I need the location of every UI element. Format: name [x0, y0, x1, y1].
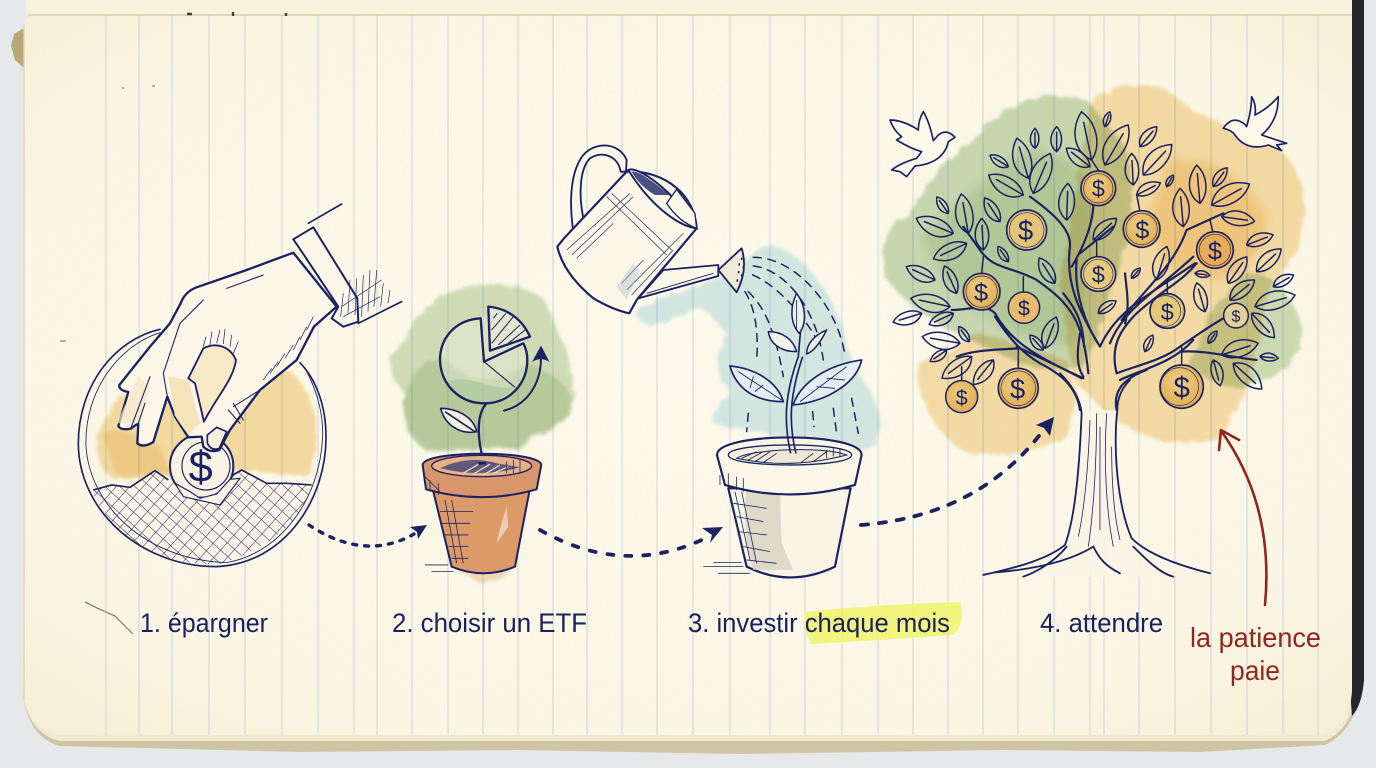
left page stain	[11, 28, 24, 68]
label: step 3: 3. investir chaque mois	[688, 608, 950, 638]
step 1: hand dropping a coin into a glass sphere	[78, 204, 402, 567]
blue water wash	[637, 245, 880, 452]
orange wash right and center	[1060, 84, 1304, 443]
branches	[952, 160, 1257, 410]
terracotta pot	[423, 454, 541, 583]
coins: $	[1018, 215, 1033, 246]
coins: $	[1018, 297, 1030, 321]
annotation: patience pays	[1190, 622, 1321, 686]
coins: $	[1135, 216, 1149, 244]
label: step 1: 1. épargner	[140, 608, 268, 638]
coins: $	[1010, 373, 1025, 404]
orange deep patch	[1147, 160, 1267, 280]
arrow: step 2 to step 3	[540, 527, 723, 556]
soil crosshatch	[92, 470, 312, 564]
step 2 and step 3 illustrations	[391, 145, 880, 583]
soil lip over coin	[175, 478, 240, 505]
arrow: step 1 to step 2	[309, 525, 427, 546]
watering can	[557, 145, 744, 313]
coins: $	[956, 386, 968, 410]
label: step 2: 2. choisir un ETF	[392, 608, 587, 638]
darker green wash band	[403, 359, 572, 450]
annotation: patience pays: la patience	[1190, 622, 1321, 653]
green wash left	[884, 95, 1132, 369]
tree watercolor washes	[884, 84, 1304, 453]
shirt cuff	[293, 204, 402, 327]
red arrow pointing to the tree	[1219, 430, 1266, 605]
coins: $	[1173, 371, 1190, 404]
coins: $	[1092, 262, 1105, 288]
top page strip	[26, 0, 1352, 16]
coin: $	[189, 444, 213, 492]
notebook dark spine edge	[1350, 0, 1364, 716]
watered pot	[703, 437, 862, 577]
green wash behind pie	[391, 284, 574, 452]
sprout	[730, 293, 862, 453]
green wash right	[1187, 273, 1302, 388]
water droplets	[745, 257, 858, 433]
orange wash lower left	[917, 333, 1077, 453]
trunk	[980, 373, 1210, 577]
binding dots	[187, 12, 286, 16]
growth arrow	[504, 347, 548, 411]
darker wash patch	[103, 430, 170, 477]
leaves	[891, 110, 1297, 395]
label: step 4: 4. attendre	[1040, 608, 1163, 638]
left bird	[890, 112, 955, 177]
coins: $	[974, 279, 988, 307]
arrow: step 3 to step 4	[861, 417, 1054, 525]
coins: $	[1161, 299, 1174, 325]
coins	[946, 171, 1248, 413]
pie chart plant	[440, 307, 530, 463]
green darker core	[923, 152, 1093, 347]
glass sphere outline	[78, 329, 326, 567]
coins: $	[1232, 309, 1241, 326]
paper specks and smudges	[60, 86, 155, 634]
highlighter mark	[804, 602, 962, 644]
coins: $	[1092, 176, 1105, 202]
step 4: money tree	[884, 84, 1304, 577]
coins: $	[1208, 237, 1222, 265]
coin	[170, 434, 233, 498]
orange wash in sphere	[97, 333, 316, 480]
hand	[117, 253, 337, 451]
notebook page stack at the bottom	[22, 660, 1358, 754]
annotation: patience pays: paie	[1230, 655, 1280, 686]
right bird	[1223, 97, 1287, 151]
